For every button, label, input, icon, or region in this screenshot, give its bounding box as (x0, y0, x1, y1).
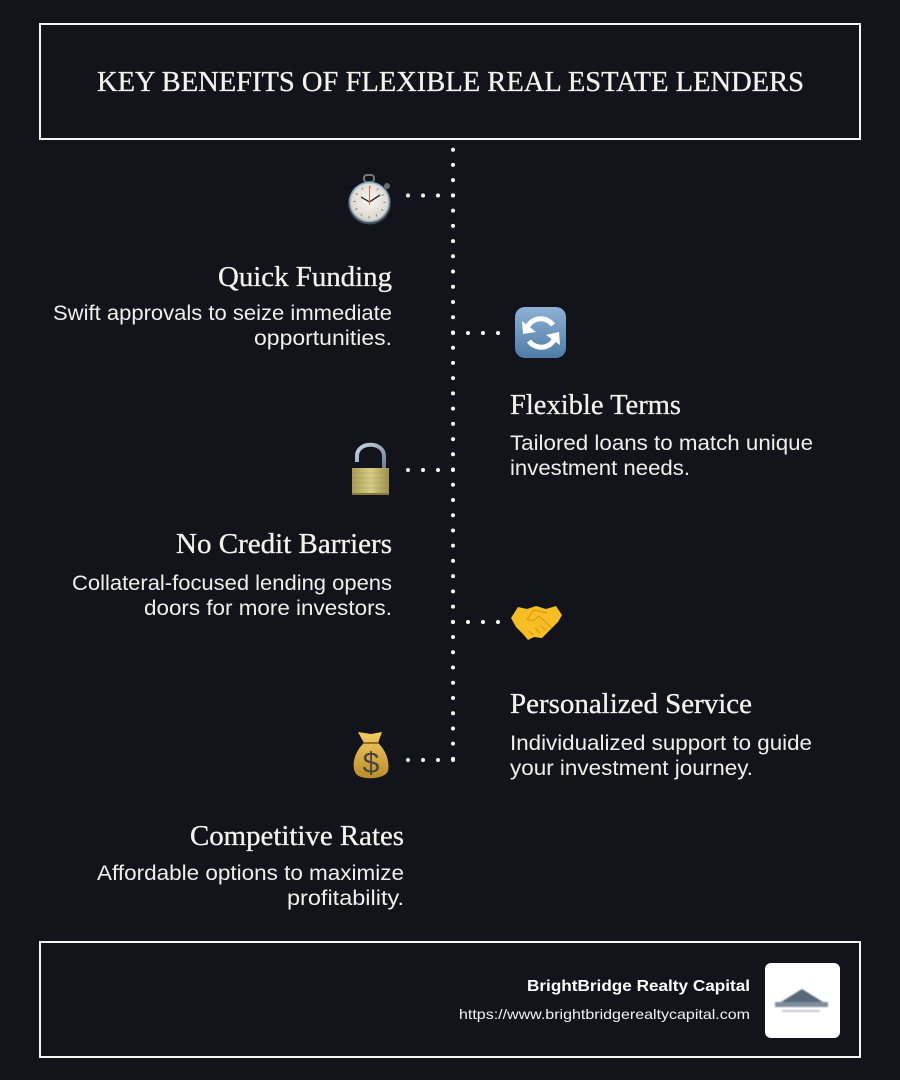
description (510, 432, 813, 480)
icon: money bag (354, 732, 389, 780)
benefit: Quick Funding (53, 175, 392, 350)
website url: https://www.brightbridgerealtycapital.com (459, 1006, 750, 1022)
heading: Personalized Service (510, 689, 752, 720)
icon: money bag: $ (363, 747, 380, 780)
description: Tailored loans to match unique (510, 432, 813, 455)
description: investment needs. (510, 457, 690, 480)
icon: open padlock (352, 445, 389, 495)
company name: BrightBridge Realty Capital (527, 978, 750, 995)
heading: Quick Funding (218, 262, 392, 293)
icon: handshake (511, 606, 562, 640)
description: Affordable options to maximize (97, 862, 404, 885)
description: profitability. (287, 887, 404, 910)
benefit: Flexible Terms (510, 307, 813, 480)
description: your investment journey. (510, 757, 753, 780)
description: doors for more investors. (144, 597, 392, 620)
description: opportunities. (254, 327, 392, 350)
description: Individualized support to guide (510, 732, 812, 755)
heading: No Credit Barriers (176, 529, 392, 560)
benefit: Personalized Service (510, 606, 812, 780)
heading: Flexible Terms (510, 390, 681, 421)
description (53, 302, 392, 350)
description (510, 732, 812, 780)
title: KEY BENEFITS OF FLEXIBLE REAL ESTATE LENDERS (97, 66, 804, 98)
icon: stopwatch (348, 175, 391, 224)
footer panel (40, 942, 860, 1057)
description (97, 862, 404, 910)
benefit: No Credit Barriers (72, 445, 392, 620)
description (72, 572, 392, 620)
heading: Competitive Rates (190, 821, 404, 852)
description: Collateral-focused lending opens (72, 572, 392, 595)
description: Swift approvals to seize immediate (53, 302, 392, 325)
icon: refresh arrows (515, 307, 566, 358)
logo (765, 963, 840, 1038)
title banner (40, 24, 860, 139)
dotted timeline (408, 150, 499, 761)
benefit: Competitive Rates (97, 732, 404, 910)
